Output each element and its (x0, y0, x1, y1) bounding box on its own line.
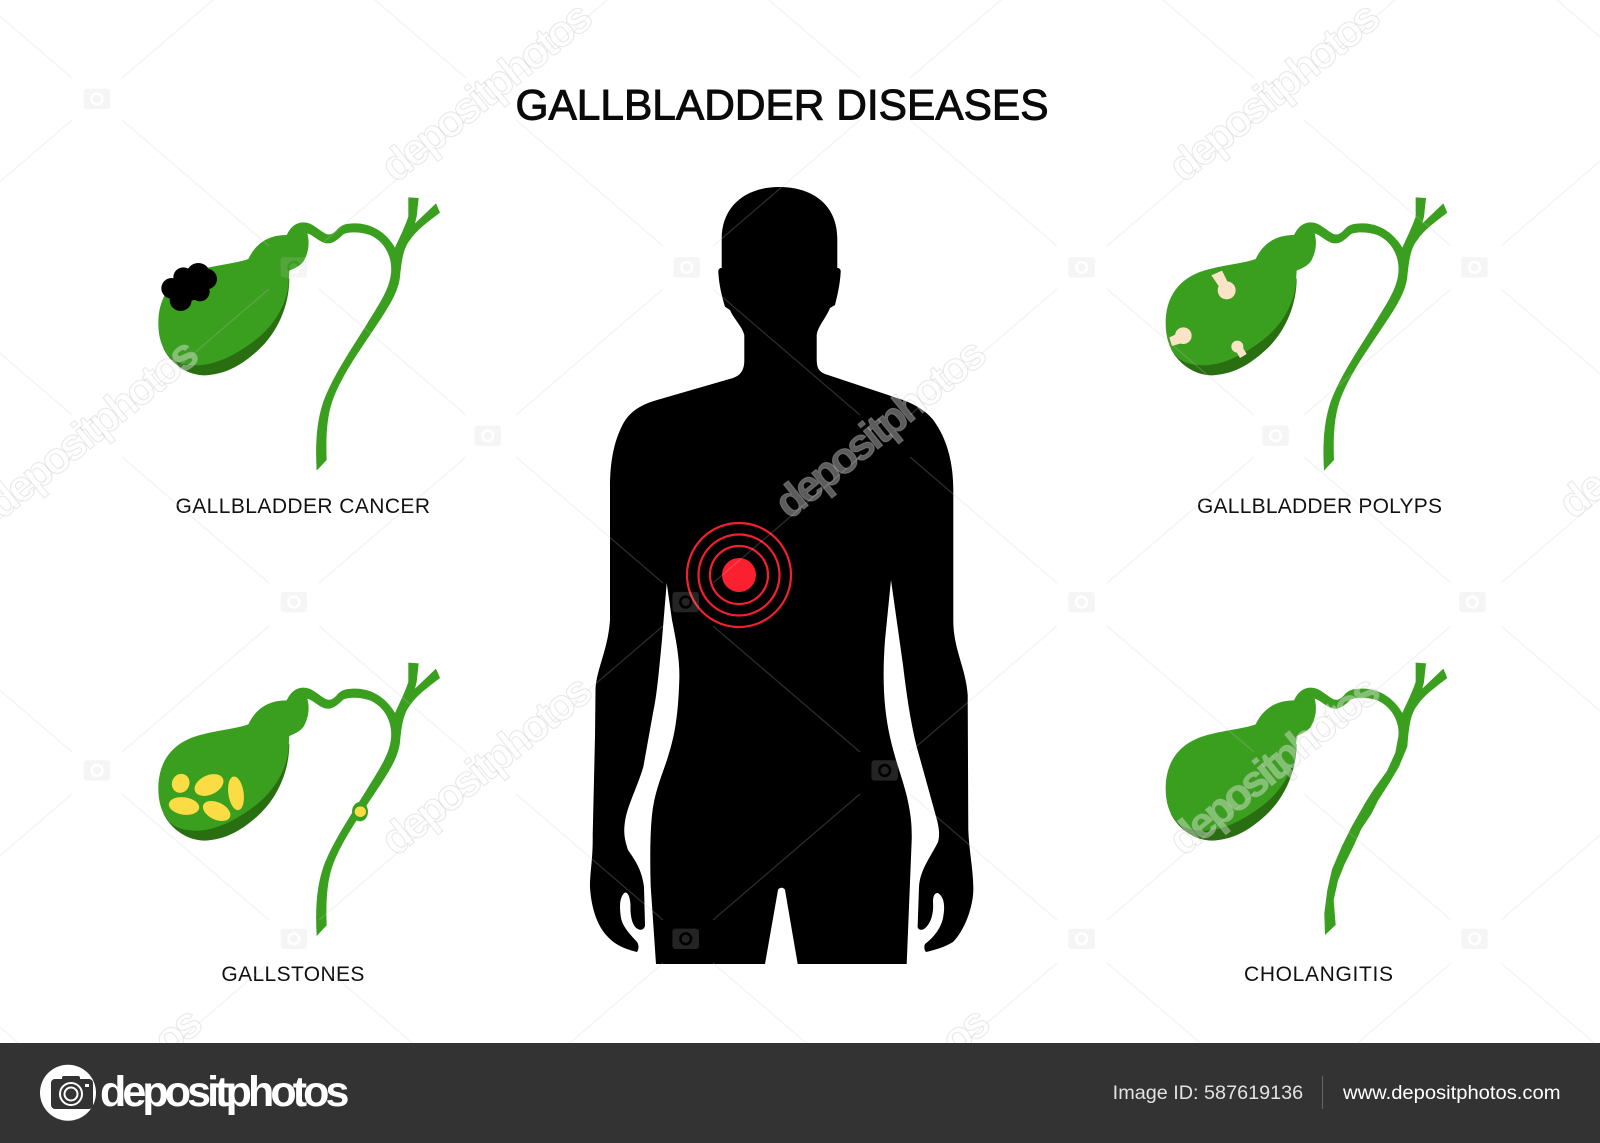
watermark overlay: os (932, 998, 998, 1065)
watermark overlay: depositphotos (765, 329, 995, 528)
gallbladder with bile duct, polyps (1166, 197, 1447, 471)
panel: cholangitis (1166, 663, 1447, 986)
footer bar (0, 1043, 1600, 1143)
panel: gallbladder cancer (158, 197, 440, 518)
label: cholangitis: CHOLANGITIS (1244, 963, 1393, 986)
watermark overlay: depositphotos (371, 666, 601, 865)
label: gallstones: GALLSTONES (221, 963, 364, 986)
human body silhouette (590, 187, 973, 964)
title: GALLBLADDER DISEASES (516, 82, 1048, 130)
icon: depositphotos camera logo (40, 1065, 96, 1121)
website url: www.depositphotos.com (1342, 1082, 1560, 1104)
gallbladder with bile duct, gallstones (158, 663, 440, 936)
watermark overlay: depositphotos (371, 0, 601, 191)
image id: Image ID: 587619136 (1113, 1082, 1303, 1104)
panel: gallstones (158, 663, 440, 986)
depositphotos wordmark: depositphotos (100, 1068, 348, 1116)
watermark overlay: depositphotos (1159, 666, 1388, 865)
gallbladder with inflamed bile duct (1166, 663, 1447, 935)
pain target: concentric red rings (687, 523, 791, 627)
watermark overlay: depositphotos (1159, 0, 1388, 191)
label: gallbladder polyps: GALLBLADDER POLYPS (1197, 495, 1442, 518)
label: gallbladder cancer: GALLBLADDER CANCER (176, 495, 430, 518)
watermark overlay: os (144, 998, 210, 1065)
panel: gallbladder polyps (1166, 197, 1447, 518)
gallbladder with bile duct, cancer (158, 197, 440, 471)
pain centre dot (722, 558, 756, 592)
